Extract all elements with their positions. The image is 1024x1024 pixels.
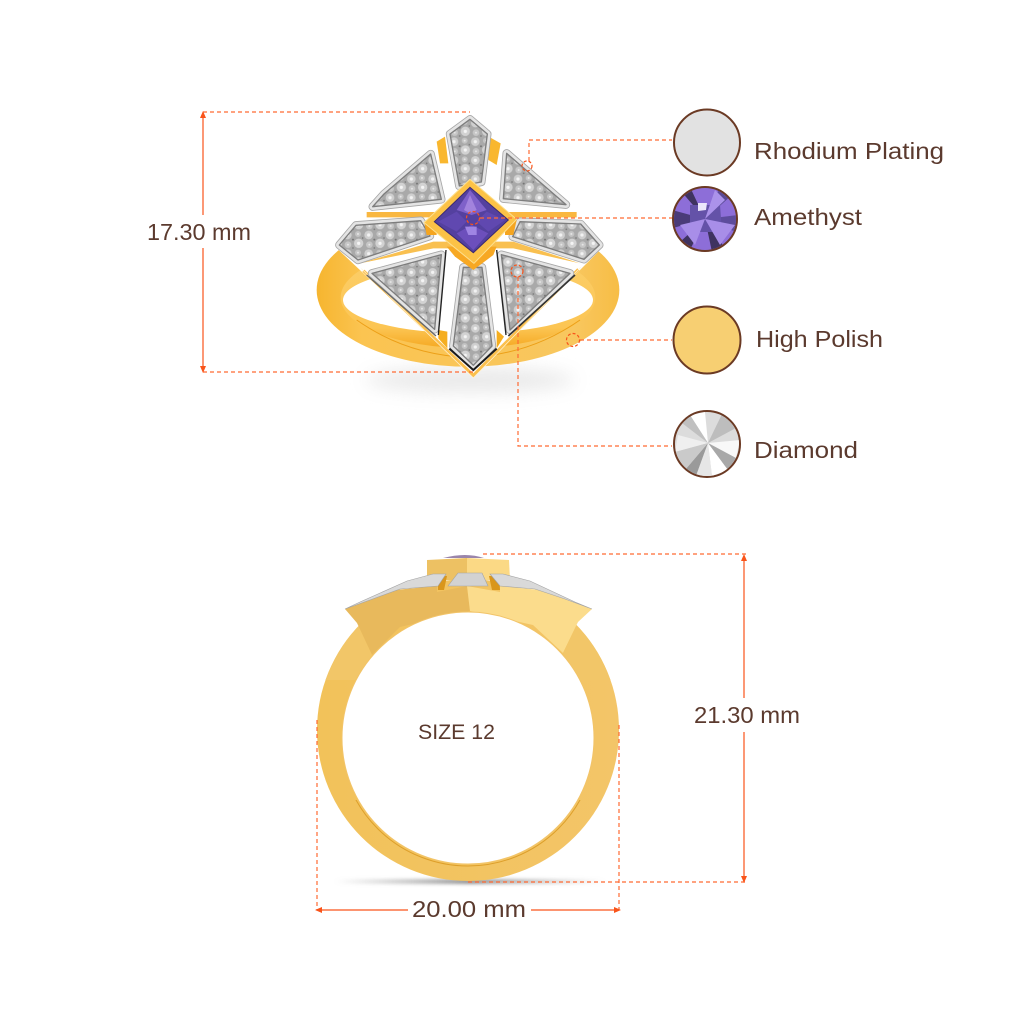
inner groove [356,800,580,866]
dimension: 21.30 mm [468,554,804,883]
gold slots [438,576,447,590]
bottom kite [449,267,497,370]
top right triangle [503,153,566,205]
top amethyst sliver [443,555,484,558]
callout: amethyst: Amethyst [754,204,863,230]
bottom left triangle [367,250,446,336]
callout: rhodium plating: Rhodium Plating [754,138,944,164]
dimension: 20.00 mm: 20.00 mm [412,896,526,922]
top block [427,558,467,580]
callout: rhodium plating [522,110,944,176]
top left triangle [373,154,441,207]
silver diamond edge center [448,573,488,586]
callout: high polish [566,306,883,374]
ring shadow [335,879,605,884]
dimension: 17.30 mm: 17.30 mm [147,219,251,245]
silver diamond edge right [490,574,592,609]
left arm tip [326,626,372,680]
dimension: 21.30 mm: 21.30 mm [694,702,800,728]
right kite [513,222,599,259]
silver diamond edge left [345,574,446,609]
callout: amethyst [466,187,863,252]
ring band [317,213,619,367]
right arm tip [564,625,610,680]
side view ring [310,555,625,884]
bottom right triangle [497,250,575,336]
ring head right [467,586,592,653]
ring band [317,579,619,881]
center amethyst setting [424,179,517,270]
callout: high polish: High Polish [756,326,883,352]
ring hole [342,612,594,864]
head backing [333,115,605,378]
size label: SIZE 12 [418,721,495,744]
ring head left [345,586,470,655]
callout: diamond: Diamond [754,437,858,463]
top kite [450,119,487,186]
dimension: 20.00 mm [315,720,621,922]
callout: diamond [511,265,858,477]
top view ring [317,115,619,378]
dimension: 17.30 mm [147,111,476,373]
left kite [339,221,430,260]
shadow under top ring [365,368,575,392]
